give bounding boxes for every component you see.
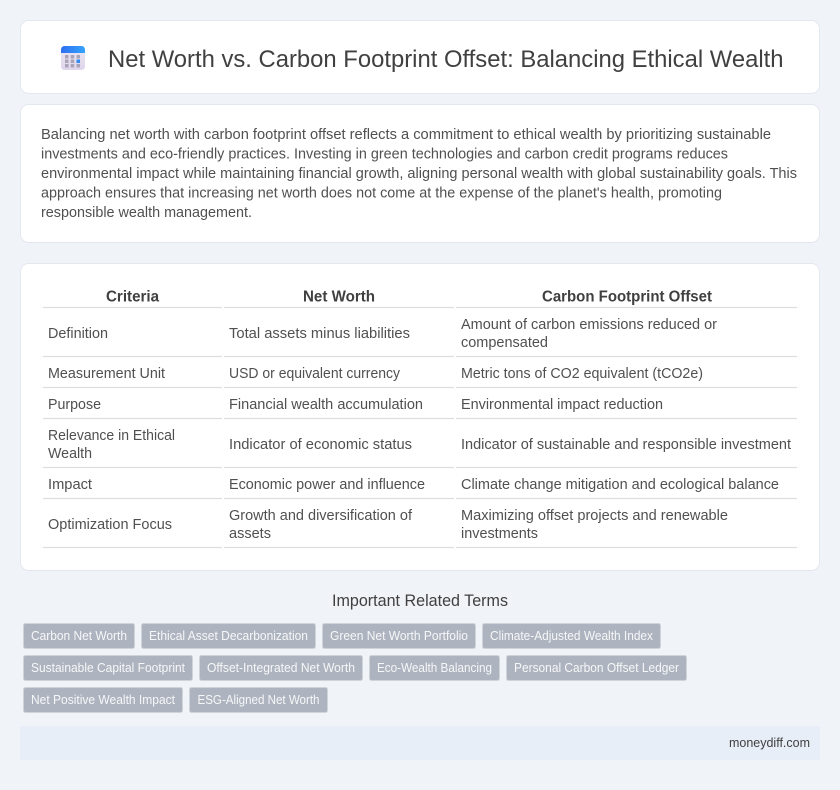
table header row: Net Worth (303, 288, 375, 306)
text block: intro (41, 127, 797, 221)
tag: ESG-Aligned Net Worth (190, 688, 328, 712)
text block: intro: Balancing net worth with carbon footprint offset reflects a commitment to ethical wealth by prioritizing sustainable (41, 127, 771, 143)
row: optimization focus: Growth and diversification of (229, 508, 413, 524)
tag: Climate-Adjusted Wealth Index: Climate-Adjusted Wealth Index (490, 629, 654, 643)
row: purpose: Financial wealth accumulation (229, 397, 423, 413)
tag: Offset-Integrated Net Worth (200, 656, 362, 680)
row: definition: Definition (48, 326, 108, 342)
row: optimization focus: Optimization Focus (48, 517, 172, 533)
panel: title header (20, 20, 820, 94)
row: relevance in ethical wealth: Wealth (48, 446, 92, 462)
row: optimization focus (48, 508, 728, 542)
tag: Eco-Wealth Balancing: Eco-Wealth Balancing (377, 661, 492, 675)
table header row: Carbon Footprint Offset (542, 288, 712, 306)
row: measurement unit: Metric tons of CO2 equivalent (tCO2e) (461, 366, 703, 382)
row: relevance in ethical wealth: Indicator of economic status (229, 437, 412, 453)
tag: Ethical Asset Decarbonization: Ethical Asset Decarbonization (149, 629, 308, 643)
panel: comparison table (20, 264, 820, 570)
row: purpose: Purpose (48, 397, 101, 413)
row: impact: Impact (48, 477, 92, 493)
tag: Climate-Adjusted Wealth Index (482, 624, 660, 648)
row: impact: Climate change mitigation and ecological balance (461, 477, 779, 493)
row: relevance in ethical wealth (48, 428, 791, 462)
tag: Net Positive Wealth Impact (24, 688, 182, 712)
text block: intro: environmental impact while maintaining financial growth, aligning personal wealth with global sustainability goals. This (41, 166, 797, 182)
panel: intro paragraph (20, 104, 820, 242)
table header row: Criteria (106, 288, 159, 306)
tag: Sustainable Capital Footprint (24, 656, 192, 680)
text block: intro: responsible wealth management. (41, 205, 252, 221)
tag: ESG-Aligned Net Worth: ESG-Aligned Net Worth (198, 693, 320, 707)
tag: Personal Carbon Offset Ledger: Personal Carbon Offset Ledger (514, 661, 679, 675)
row: relevance in ethical wealth: Indicator of sustainable and responsible investment (461, 437, 791, 453)
panel: related term tags (24, 624, 686, 712)
table header row (106, 288, 712, 306)
text block: intro: approach ensures that increasing net worth does not come at the expense of the planet's health, promoting (41, 186, 722, 202)
row: optimization focus: Maximizing offset projects and renewable (461, 508, 728, 524)
row: purpose (48, 397, 663, 413)
row: definition (48, 317, 717, 351)
row: measurement unit: Measurement Unit (48, 366, 165, 382)
row: definition: compensated (461, 335, 548, 351)
tag: Net Positive Wealth Impact: Net Positive Wealth Impact (31, 693, 175, 707)
tag: Carbon Net Worth (24, 624, 134, 648)
row: optimization focus: assets (229, 526, 271, 542)
row: definition: Total assets minus liabilities (229, 326, 410, 342)
row: definition: Amount of carbon emissions reduced or (461, 317, 717, 333)
row: measurement unit (48, 366, 703, 382)
heading: important related terms: Important Related Terms (332, 592, 508, 610)
tag: Offset-Integrated Net Worth: Offset-Integrated Net Worth (207, 661, 355, 675)
row: measurement unit: USD or equivalent currency (229, 366, 401, 382)
tag: Green Net Worth Portfolio (322, 624, 476, 648)
title: Net Worth vs. Carbon Footprint Offset: Balancing Ethical Wealth (108, 46, 784, 73)
tag: Sustainable Capital Footprint: Sustainable Capital Footprint (31, 661, 186, 675)
tag: Eco-Wealth Balancing (370, 656, 500, 680)
row: relevance in ethical wealth: Relevance in Ethical (48, 428, 175, 444)
tag: Personal Carbon Offset Ledger (506, 656, 686, 680)
footer: moneydiff.com (729, 736, 810, 750)
row: impact: Economic power and influence (229, 477, 425, 493)
tag: Ethical Asset Decarbonization (142, 624, 316, 648)
tag: Green Net Worth Portfolio: Green Net Worth Portfolio (330, 629, 468, 643)
icon: calendar (61, 46, 85, 70)
row: optimization focus: investments (461, 526, 538, 542)
row: purpose: Environmental impact reduction (461, 397, 663, 413)
tag: Carbon Net Worth: Carbon Net Worth (31, 629, 127, 643)
text block: intro: investments and eco-friendly practices. Investing in green technologies and carbon credit programs reduces (41, 146, 728, 162)
row: impact (48, 477, 779, 493)
footer (20, 726, 820, 760)
